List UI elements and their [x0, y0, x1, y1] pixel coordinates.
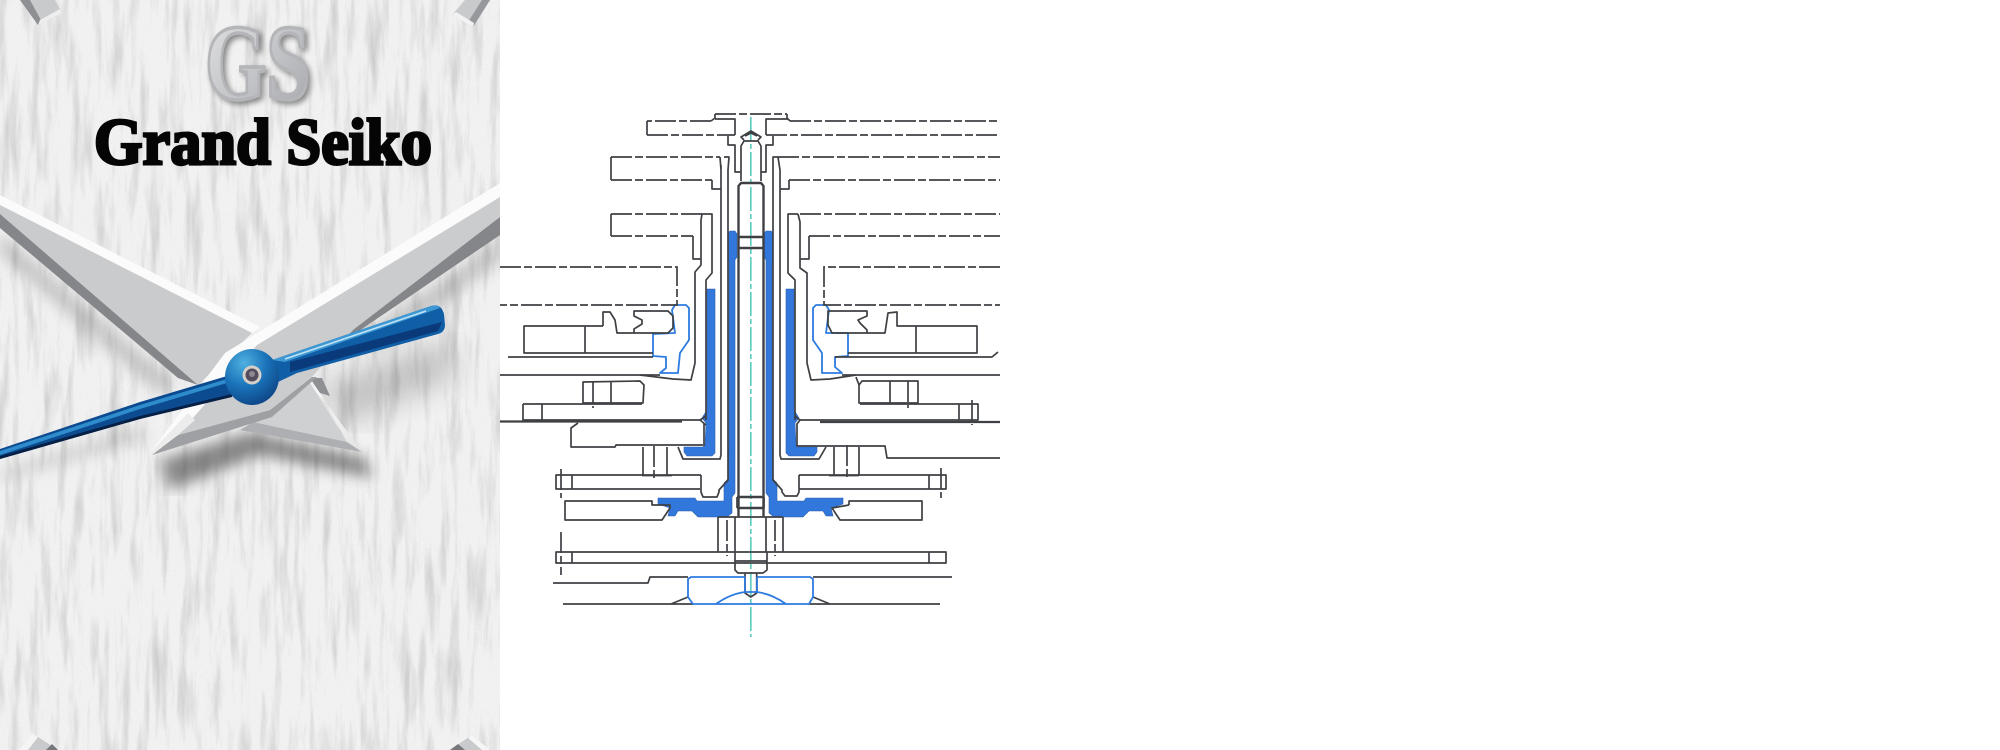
logo: Grand Seiko wordmark: Grand Seiko	[94, 106, 432, 179]
lower plate and jewel assembly	[553, 517, 952, 604]
clock hand: left arm with tail	[0, 195, 363, 452]
blue parts: inner tube and flange, right	[764, 231, 843, 517]
blue parts: outer cup, right	[786, 289, 817, 456]
clock hand: right arm with tail	[150, 183, 500, 455]
textured white dial	[0, 0, 500, 750]
centre axis line	[750, 117, 752, 637]
central pinion and pivot	[718, 131, 783, 517]
hand shadows	[0, 232, 500, 490]
logo: GS emblem	[207, 25, 314, 108]
hour marker: top right	[452, 0, 490, 27]
blue outlined gasket, right	[813, 305, 848, 373]
upper housing lines, left	[500, 114, 787, 497]
blue parts: outer cup, left	[684, 289, 715, 456]
logo: GS emblem: GS	[205, 4, 310, 123]
gear stack, left	[500, 311, 706, 520]
panel: movement cross-section diagram	[500, 114, 1000, 637]
clock hand: blue seconds hand	[0, 305, 445, 459]
logo: GS emblem: GS	[208, 7, 313, 126]
hour marker: top left	[20, 0, 62, 25]
blue parts: inner tube and flange, left	[658, 231, 737, 517]
hour marker: bottom left	[18, 733, 58, 750]
upper housing lines, right	[761, 114, 1000, 496]
gear stack, right	[795, 311, 1000, 520]
blue outlined gasket, left	[653, 305, 689, 373]
panel: watch dial photograph	[0, 0, 500, 750]
hour marker: bottom right	[450, 735, 490, 750]
